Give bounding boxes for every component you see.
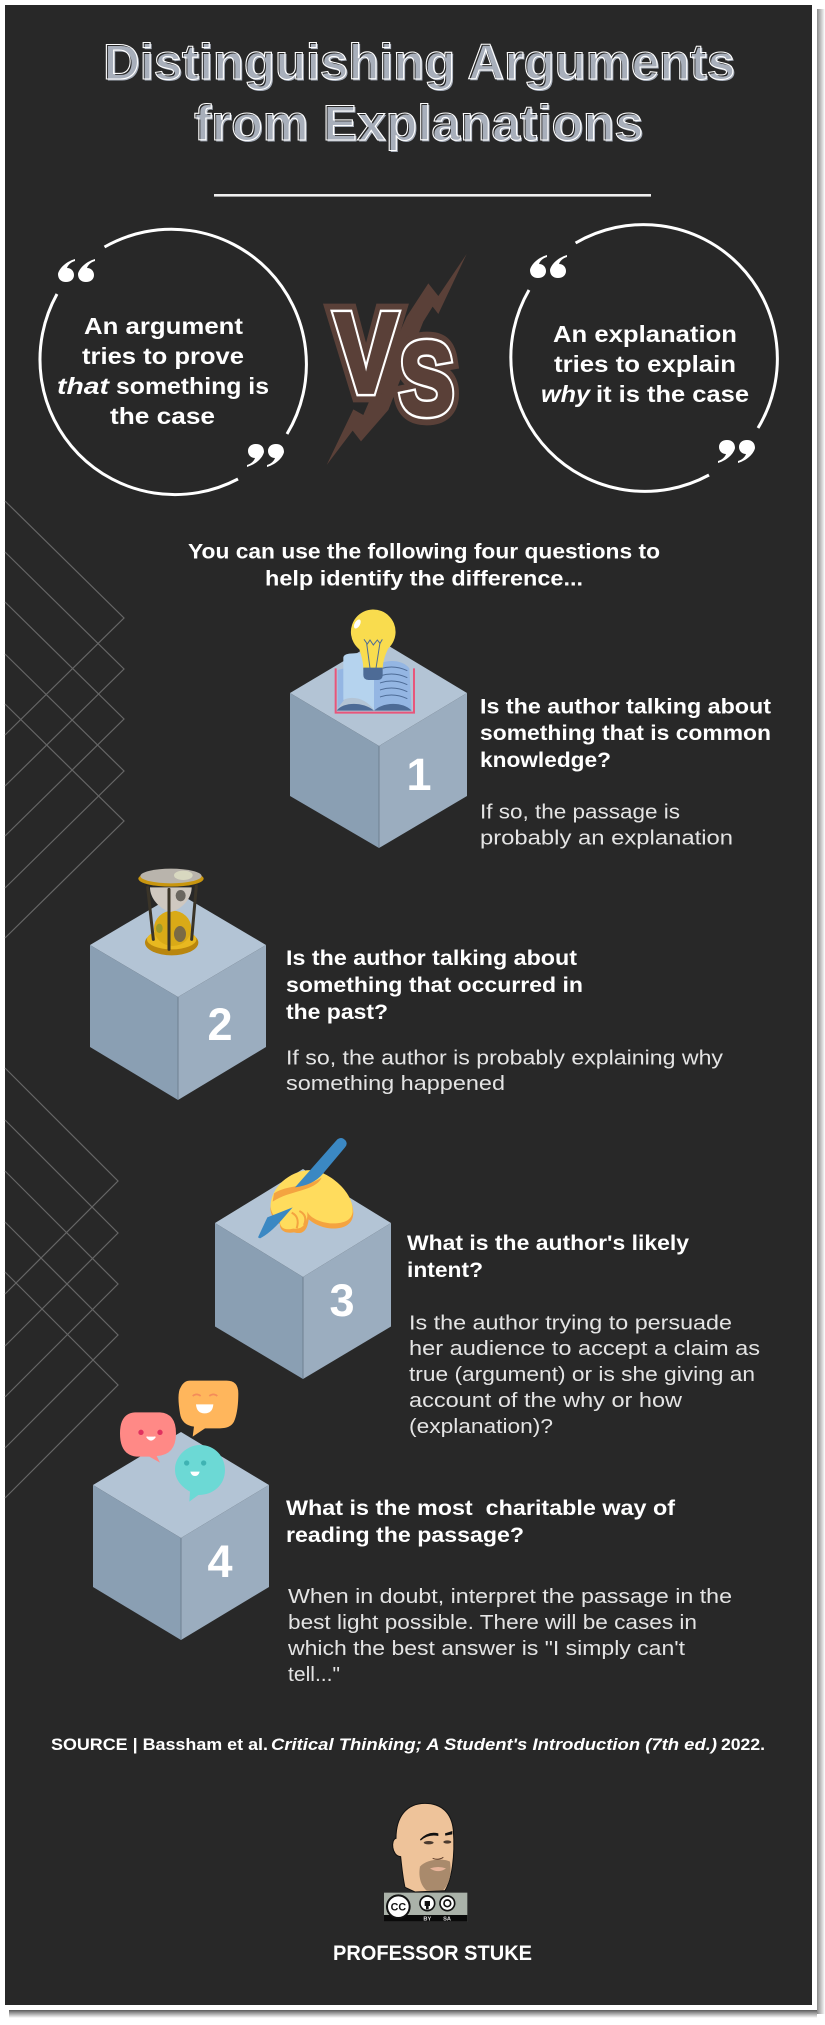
argument text: that — [57, 373, 111, 399]
step 4 heading: What is the most charitable way of — [286, 1497, 676, 1520]
step 4 body: tell..." — [288, 1664, 340, 1686]
explanation text: it is the case — [596, 381, 749, 407]
title — [103, 34, 736, 152]
license badge: CC — [391, 1901, 406, 1913]
number 1: 1 — [406, 749, 432, 800]
source line: Critical Thinking; A Student's Introduction (7th ed.) — [271, 1735, 717, 1754]
source line: 2022. — [721, 1735, 765, 1754]
explanation text: An explanation — [553, 321, 737, 347]
step 3 body: her audience to accept a claim as — [409, 1338, 760, 1360]
cube 2 — [90, 893, 266, 1100]
author name: PROFESSOR STUKE — [333, 1942, 532, 1965]
license badge: BY — [423, 1916, 431, 1922]
panel: argument quote — [40, 229, 306, 495]
step 2 heading: something that occurred in — [286, 974, 583, 997]
icon: closing quote right — [718, 440, 755, 463]
V letter: V — [335, 290, 397, 417]
explanation text: why — [541, 381, 591, 407]
argument text: something is — [116, 373, 269, 399]
step 1 body: probably an explanation — [480, 828, 733, 850]
step 3 heading: intent? — [407, 1259, 483, 1282]
step 1 — [290, 610, 771, 850]
step 1 body — [480, 802, 733, 850]
author portrait — [384, 1803, 467, 1922]
panel: explanation quote — [511, 225, 777, 491]
step 3 body: Is the author trying to persuade — [409, 1312, 732, 1334]
step 1 heading: knowledge? — [480, 749, 611, 772]
icon: closing quote left — [247, 444, 284, 467]
step 2 body — [286, 1048, 723, 1095]
step 3 heading — [407, 1232, 689, 1282]
V letter: V — [335, 290, 397, 417]
S letter: S — [399, 320, 454, 436]
title: Distinguishing Arguments — [103, 34, 735, 90]
icon: book and lightbulb — [336, 610, 414, 713]
icon: speech bubbles — [120, 1381, 238, 1502]
icon: writing hand — [258, 1138, 353, 1238]
V letter: V — [335, 290, 397, 417]
step 2 heading: Is the author talking about — [286, 947, 577, 970]
title: Distinguishing Arguments — [104, 36, 736, 92]
step 3 body — [409, 1312, 760, 1438]
step 3 body: true (argument) or is she giving an — [409, 1364, 755, 1386]
step 2 — [90, 869, 723, 1100]
number 4: 4 — [207, 1536, 233, 1587]
intro text: help identify the difference... — [265, 568, 583, 590]
step 4 heading — [286, 1497, 676, 1547]
argument text: An argument — [84, 313, 243, 339]
step 2 body: If so, the author is probably explaining why — [286, 1048, 723, 1070]
argument text — [57, 313, 269, 429]
step 4 body — [287, 1586, 732, 1686]
step 2 heading: the past? — [286, 1001, 388, 1024]
cube 4 — [93, 1432, 269, 1640]
license badge — [384, 1893, 467, 1922]
argument text: tries to prove — [82, 343, 244, 369]
step 2 body: something happened — [286, 1073, 505, 1095]
explanation text: tries to explain — [554, 351, 736, 377]
license badge: SA — [443, 1916, 451, 1922]
step 1 heading: Is the author talking about — [480, 696, 771, 718]
step 1 body: If so, the passage is — [480, 802, 680, 824]
intro text: You can use the following four questions to — [188, 540, 660, 564]
step 3 — [215, 1138, 760, 1438]
lightning bolt — [327, 254, 467, 465]
S letter: S — [399, 320, 454, 436]
step 3 body: (explanation)? — [409, 1416, 553, 1438]
number 2: 2 — [207, 999, 233, 1050]
step 3 body: account of the why or how — [409, 1390, 683, 1412]
step 3 heading: What is the author's likely — [407, 1232, 689, 1255]
step 1 heading — [480, 696, 771, 772]
cube 1 — [290, 640, 467, 848]
step 4 body: When in doubt, interpret the passage in the — [288, 1586, 732, 1608]
step 4 body: which the best answer is "I simply can't — [287, 1638, 686, 1660]
argument text: the case — [110, 403, 215, 429]
step 4 — [93, 1381, 732, 1686]
source line: SOURCE | Bassham et al. — [51, 1735, 268, 1754]
source line — [51, 1735, 765, 1754]
VS graphic — [327, 254, 467, 465]
number 3: 3 — [329, 1275, 355, 1326]
explanation text — [541, 321, 749, 407]
intro text — [188, 540, 660, 590]
step 2 heading — [286, 947, 583, 1024]
icon: hourglass — [138, 869, 204, 955]
title: from Explanations — [194, 95, 643, 151]
S letter: S — [399, 320, 454, 436]
step 1 heading: something that is common — [480, 722, 771, 745]
cube 3 — [215, 1169, 391, 1379]
step 4 heading: reading the passage? — [286, 1524, 524, 1547]
step 4 body: best light possible. There will be cases in — [288, 1612, 697, 1634]
title: from Explanations — [196, 96, 644, 152]
icon: opening quote left — [58, 259, 95, 282]
icon: opening quote right — [530, 255, 567, 278]
